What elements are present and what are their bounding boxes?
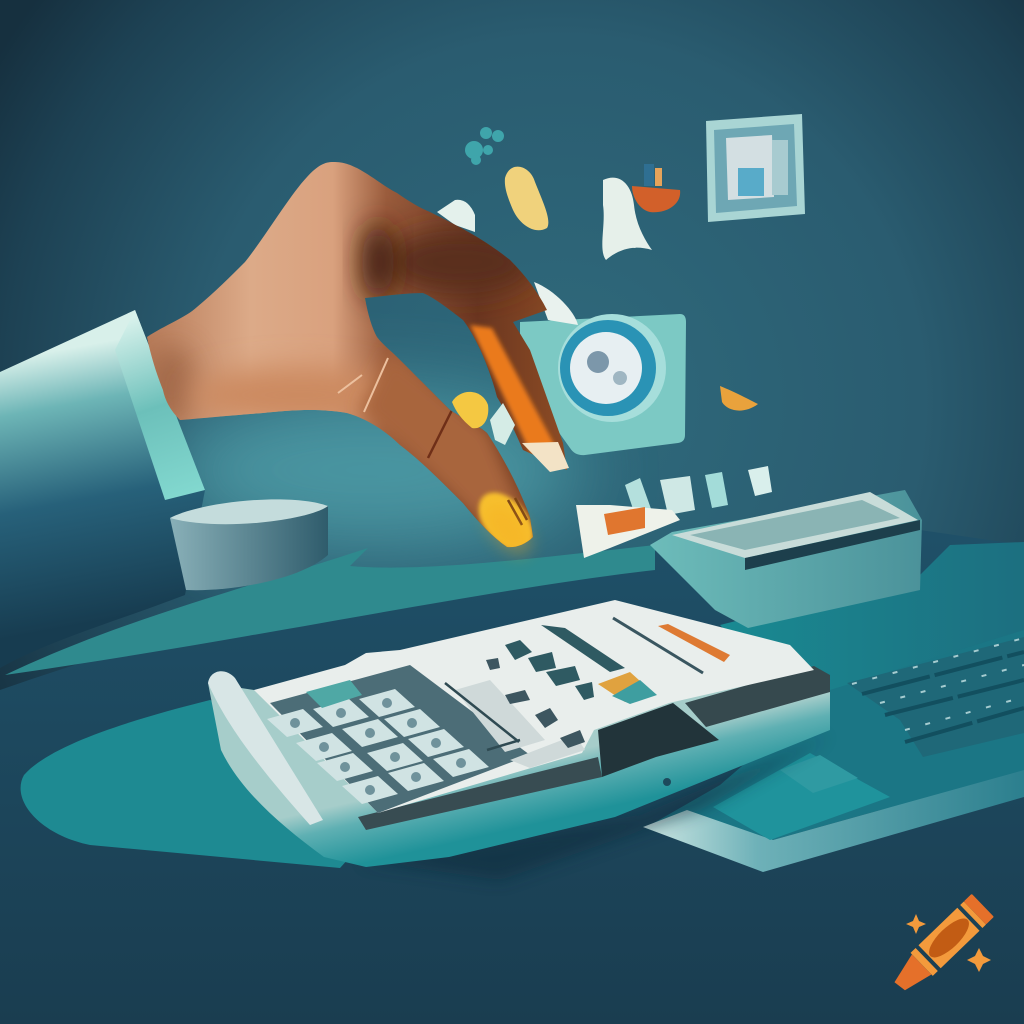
light keypad panels: [455, 680, 585, 768]
desk surface: [0, 530, 1024, 1024]
laptop trackpad: [713, 753, 890, 840]
sleeve: [0, 310, 205, 668]
laptop keyboard: [847, 637, 1024, 757]
dorsal shadow: [385, 230, 535, 294]
printer tray: [576, 505, 680, 558]
floating orange leaf: [720, 386, 758, 411]
teal desk band behind the sleeve: [5, 545, 655, 675]
floating teal cluster: [465, 127, 504, 165]
dark hinge clip: [598, 703, 719, 777]
calculator front button: [663, 778, 671, 786]
floating orange bowl: [632, 164, 680, 212]
orange pen: [658, 624, 730, 662]
laptop deck: [645, 630, 1024, 840]
teal top key: [306, 680, 362, 708]
palm wrinkle: [338, 358, 388, 412]
paper slips: [625, 478, 655, 530]
teal desk mat on the right: [720, 542, 1024, 810]
wrist shadow: [148, 345, 196, 425]
crayon oval: [923, 913, 975, 963]
pale splash by the finger: [490, 403, 515, 445]
thumb nail marks: [508, 498, 527, 525]
crayon cap: [964, 894, 994, 925]
floating device with dial: [520, 282, 686, 455]
hand shading: [148, 222, 568, 562]
yellow blob by the finger: [452, 392, 488, 428]
index finger tip: [522, 442, 569, 472]
round puck: [170, 499, 328, 590]
top white plate: [254, 600, 814, 813]
floating white tag: [602, 178, 652, 260]
key markings: [290, 698, 466, 795]
keypad keys: [267, 689, 489, 804]
thin dark key lines: [445, 683, 520, 750]
device clip: [534, 282, 578, 325]
crayon body: [918, 908, 980, 968]
finger crease: [362, 222, 394, 302]
small sparkle: [906, 914, 926, 934]
scattered dark marks: [486, 658, 585, 748]
crayon collar band: [960, 901, 986, 928]
left side rail: [208, 671, 323, 825]
lower palm tone: [190, 367, 410, 423]
printer device: [576, 466, 922, 628]
thumb nail glow: [476, 490, 533, 548]
calculator shadow: [360, 735, 830, 880]
dark function keys: [505, 625, 625, 700]
dark keyboard band: [358, 757, 602, 830]
teal desk mat on the left: [21, 700, 420, 868]
orange and teal display tab: [598, 672, 650, 702]
large sparkle: [967, 948, 991, 972]
paper sheet edge: [643, 770, 1024, 872]
thumb tone: [360, 350, 535, 550]
thumb tip glow: [476, 497, 540, 563]
floating yellow pill: [505, 167, 548, 230]
crayon tip: [889, 954, 931, 997]
teal glow under the hand: [160, 390, 580, 550]
pen line: [613, 618, 703, 673]
hand: [147, 162, 568, 562]
thumb joint line: [428, 410, 452, 458]
shirt cuff: [115, 310, 205, 500]
trackpad button: [780, 755, 858, 793]
keypad bed: [270, 665, 530, 813]
dark right band: [685, 666, 830, 727]
calculator body: [208, 680, 830, 867]
calculator: [208, 600, 830, 880]
framed picture: [706, 114, 805, 222]
crayon logo: [888, 894, 994, 998]
floating white shape near the knuckle: [437, 200, 475, 232]
orange index finger stripe: [470, 325, 568, 470]
crayon collar: [911, 948, 938, 976]
